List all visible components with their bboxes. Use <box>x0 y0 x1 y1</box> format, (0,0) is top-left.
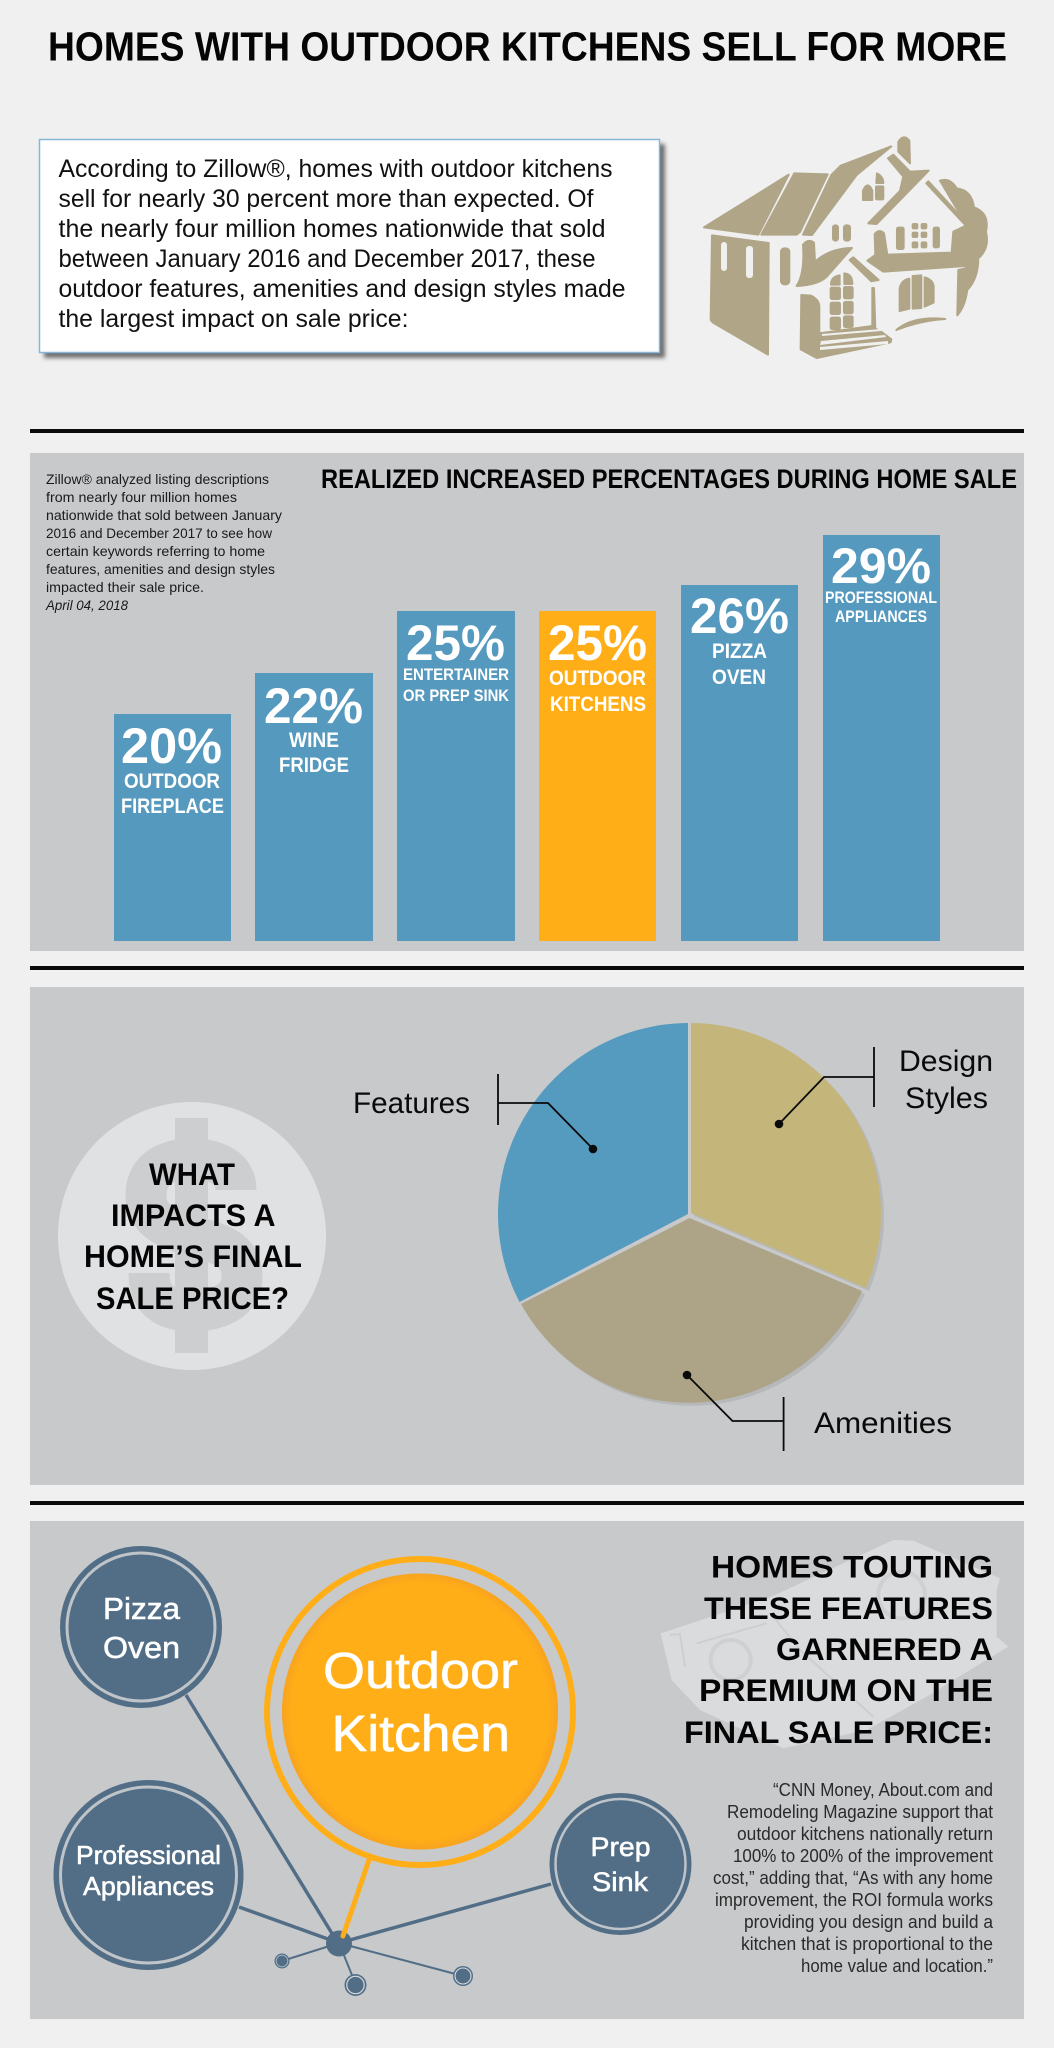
orange connector <box>343 1860 369 1936</box>
intro text box: outdoor features, amenities and design styles made <box>58 275 626 303</box>
bar: professional appliances <box>823 535 940 941</box>
bar: outdoor kitchens: OUTDOOR <box>549 667 646 690</box>
bar: outdoor fireplace <box>114 714 231 941</box>
source note: Zillow® analyzed listing descriptions <box>46 471 269 487</box>
bar: outdoor kitchens <box>539 611 656 941</box>
bar: entertainer or prep sink: ENTERTAINER <box>403 665 509 684</box>
node: prep sink: Sink <box>592 1867 649 1897</box>
source note: nationwide that sold between January <box>46 507 282 523</box>
source note: impacted their sale price. <box>46 579 204 595</box>
bar: entertainer or prep sink: OR PREP SINK <box>403 686 510 705</box>
house window cut-outs <box>721 242 888 350</box>
source note: from nearly four million homes <box>46 489 237 505</box>
divider 2 <box>30 966 1024 970</box>
small node bottom <box>344 1974 366 1996</box>
quote text: outdoor kitchens nationally return <box>737 1824 993 1844</box>
small node right <box>453 1966 473 1986</box>
bar: wine fridge: FRIDGE <box>279 754 349 777</box>
heading: premium features: PREMIUM ON THE <box>699 1672 993 1708</box>
quote text: home value and location.” <box>801 1956 993 1976</box>
bar: outdoor kitchens: KITCHENS <box>550 693 646 716</box>
source note <box>45 471 282 613</box>
icon: dollar badge <box>58 1102 326 1370</box>
node: professional appliances: Appliances <box>83 1871 214 1901</box>
section heading: WHAT <box>149 1156 235 1192</box>
node: pizza oven: Pizza <box>103 1591 181 1626</box>
section heading: IMPACTS A <box>111 1197 276 1233</box>
panel: pie chart section <box>30 987 1024 1485</box>
callout: amenities <box>683 1371 952 1451</box>
intro text box: sell for nearly 30 percent more than expected. Of <box>58 185 594 213</box>
quote text: “CNN Money, About.com and <box>773 1780 993 1800</box>
bar: outdoor kitchens: 25% <box>548 615 647 671</box>
source note: 2016 and December 2017 to see how <box>46 525 273 541</box>
callout: features: Features <box>353 1087 470 1120</box>
quote text: cost,” adding that, “As with any home <box>713 1868 993 1888</box>
bar: outdoor fireplace: FIREPLACE <box>121 795 224 818</box>
node: professional appliances: Professional <box>76 1840 221 1870</box>
heading: premium features: FINAL SALE PRICE: <box>684 1714 993 1750</box>
divider 1 <box>30 429 1024 433</box>
panel: bar chart <box>30 453 1024 951</box>
pie chart <box>498 1023 884 1406</box>
slice: design styles <box>691 1023 881 1288</box>
node: prep sink: Prep <box>590 1832 650 1862</box>
bar: wine fridge <box>255 673 373 941</box>
bar: entertainer or prep sink <box>397 611 515 941</box>
bar: entertainer or prep sink: 25% <box>406 615 505 671</box>
callout: features <box>353 1074 597 1153</box>
bar: outdoor fireplace: OUTDOOR <box>124 770 220 793</box>
divider 3 <box>30 1501 1024 1505</box>
quote text: providing you design and build a <box>744 1912 994 1932</box>
intro text box: the nearly four million homes nationwide that sold <box>58 215 606 243</box>
icon: house <box>704 137 987 358</box>
section heading <box>84 1156 302 1316</box>
bar: wine fridge: WINE <box>289 729 339 752</box>
heading: premium features <box>684 1548 993 1750</box>
intro text box: between January 2016 and December 2017, these <box>58 245 596 273</box>
panel: features network <box>30 1521 1024 2019</box>
slice: features <box>498 1023 688 1302</box>
bar: pizza oven: OVEN <box>712 666 766 689</box>
node: pizza oven <box>60 1546 222 1708</box>
node: prep sink <box>550 1793 692 1935</box>
callout: design styles <box>775 1045 993 1128</box>
bar: outdoor fireplace: 20% <box>121 718 222 774</box>
intro text box: According to Zillow®, homes with outdoor kitchens <box>58 155 612 183</box>
callout: design styles: Design <box>899 1045 993 1078</box>
source note: features, amenities and design styles <box>46 561 275 577</box>
slice: amenities <box>521 1218 862 1403</box>
source note: April 04, 2018 <box>45 597 128 613</box>
node: pizza oven: Oven <box>103 1630 180 1665</box>
icon: money watermark <box>661 1540 1008 1748</box>
callout: design styles: Styles <box>905 1082 988 1115</box>
bar: pizza oven <box>681 585 798 941</box>
section heading: HOME’S FINAL <box>84 1238 302 1274</box>
bar: professional appliances: PROFESSIONAL <box>825 588 937 607</box>
node: professional appliances <box>54 1780 244 1970</box>
section heading: SALE PRICE? <box>96 1280 289 1316</box>
hub node <box>326 1930 352 1956</box>
quote text: kitchen that is proportional to the <box>741 1934 993 1954</box>
node: outdoor kitchen: Kitchen <box>332 1705 510 1762</box>
quote text: 100% to 200% of the improvement <box>733 1846 993 1866</box>
bar: wine fridge: 22% <box>264 678 363 734</box>
bar: pizza oven: PIZZA <box>712 640 767 663</box>
quote text: Remodeling Magazine support that <box>727 1802 993 1822</box>
quote text: improvement, the ROI formula works <box>715 1890 993 1910</box>
small node left <box>274 1954 290 1968</box>
quote text <box>713 1780 994 1976</box>
connector lines <box>186 1695 551 1985</box>
heading: premium features: THESE FEATURES <box>704 1590 993 1626</box>
heading: premium features: HOMES TOUTING <box>711 1548 993 1584</box>
callout: amenities: Amenities <box>814 1407 952 1440</box>
bar: professional appliances: APPLIANCES <box>835 607 927 626</box>
intro text box <box>40 140 665 358</box>
heading: premium features: GARNERED A <box>776 1631 993 1667</box>
bar: professional appliances: 29% <box>831 538 931 594</box>
intro text box: the largest impact on sale price: <box>58 305 408 333</box>
source note: certain keywords referring to home <box>46 543 265 559</box>
node: outdoor kitchen: Outdoor <box>323 1642 518 1699</box>
bar: pizza oven: 26% <box>690 588 789 644</box>
node: outdoor kitchen <box>267 1559 573 1865</box>
